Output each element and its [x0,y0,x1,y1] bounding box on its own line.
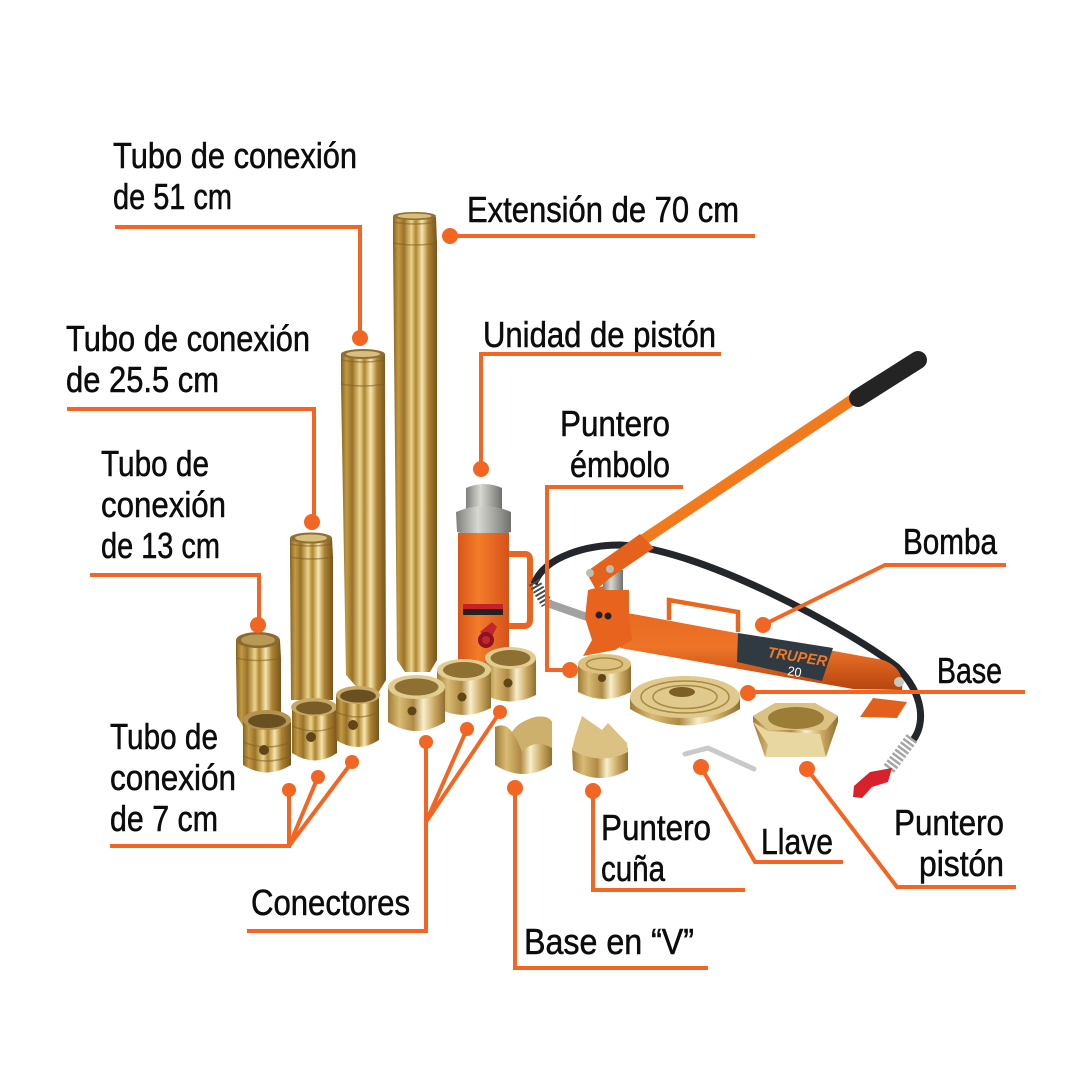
callout: puntero cuña [585,783,745,890]
callout: tubo de conexión 13 cm: conexión [101,484,226,525]
hose red coupler [853,768,892,798]
pump grip [858,360,918,398]
puntero émbolo [578,654,631,699]
llave [685,748,754,769]
pump label: TRUPER [766,644,828,670]
coupling 1 [243,710,291,772]
callout: bomba: Bomba [903,521,998,562]
tube: connection 13 cm [236,632,281,728]
pump rear foot [860,698,907,718]
hose left metal spring [534,582,547,604]
callout: tubo de conexión 51 cm: de 51 cm [113,176,232,217]
pump cylinder body [620,612,902,690]
callout: tubo de conexión 7 cm: de 7 cm [110,798,218,839]
callout: unidad de pistón: Unidad de pistón [483,314,716,355]
callout: tubo de conexión 51 cm: Tubo de conexión [113,135,357,176]
pump pins [586,565,614,620]
callout: puntero cuña: Puntero [601,807,711,848]
callout: extensión de 70 cm: Extensión de 70 cm [467,189,739,230]
tube: extension 70 cm [393,212,437,672]
callout: base: Base [937,650,1002,691]
coupling 3 [336,686,380,747]
callout: puntero pistón [799,761,1016,887]
connector 2 [437,659,491,715]
callout: base en V: Base en “V” [524,921,694,962]
piston warning label [463,604,503,615]
pump hydraulic hose [534,545,921,798]
callout: conectores: Conectores [251,882,410,923]
pump label [737,633,833,681]
pump label: 20 [787,663,803,680]
hydraulic pump [583,360,918,718]
piston handle [507,554,530,626]
piston collar [456,506,511,536]
callout: tubo de conexión 7 cm [110,716,359,846]
callout: puntero émbolo [547,403,683,678]
piston body [458,533,509,683]
tube: connection 51 cm [341,349,386,693]
connector 1 [388,675,445,731]
callout: tubo de conexión 25.5 cm [66,318,320,530]
callout: puntero émbolo: émbolo [570,444,670,485]
callout: base en V [507,780,708,968]
hose right metal spring [888,738,912,770]
hose left fitting [547,603,590,618]
callout: tubo de conexión 7 cm: Tubo de [110,716,218,757]
callout: puntero cuña: cuña [601,848,666,889]
piston rod top [466,484,502,512]
callout: unidad de pistón [473,314,721,477]
callout: tubo de conexión 51 cm [113,135,368,346]
piston red valve [478,622,497,648]
callout: tubo de conexión 7 cm: conexión [110,757,236,798]
callout: tubo de conexión 25.5 cm: Tubo de conexión [66,318,310,359]
callout: bomba [755,521,1006,633]
callout: tubo de conexión 13 cm [90,443,266,633]
puntero pistón [753,703,838,757]
callout: llave: Llave [761,821,833,862]
callout: extensión de 70 cm [442,189,755,244]
callout: tubo de conexión 13 cm: de 13 cm [101,525,220,566]
connector 3 [485,647,536,702]
pump head block [583,586,632,656]
puntero cuña [572,716,628,778]
callout: conectores [247,705,507,931]
callout: tubo de conexión 25.5 cm: de 25.5 cm [66,359,219,400]
pump carry handle [669,600,738,632]
base disc [630,676,740,726]
base en V [495,717,552,774]
callout: puntero pistón: pistón [919,843,1004,884]
pump end cap bolt [894,677,904,687]
callout: llave [693,759,843,862]
callout: base [740,650,1025,701]
callout: tubo de conexión 13 cm: Tubo de [101,443,209,484]
couplings 7 cm [243,686,380,772]
piston unit [456,484,530,683]
callout: puntero pistón: Puntero [894,802,1004,843]
pump clevis [586,534,654,590]
coupling 2 [291,698,337,760]
connectors [388,647,536,731]
pump lever [643,398,855,540]
tube: connection 25.5 cm [290,532,333,700]
callout: puntero émbolo: Puntero [560,403,670,444]
pump silver rods [603,570,623,595]
